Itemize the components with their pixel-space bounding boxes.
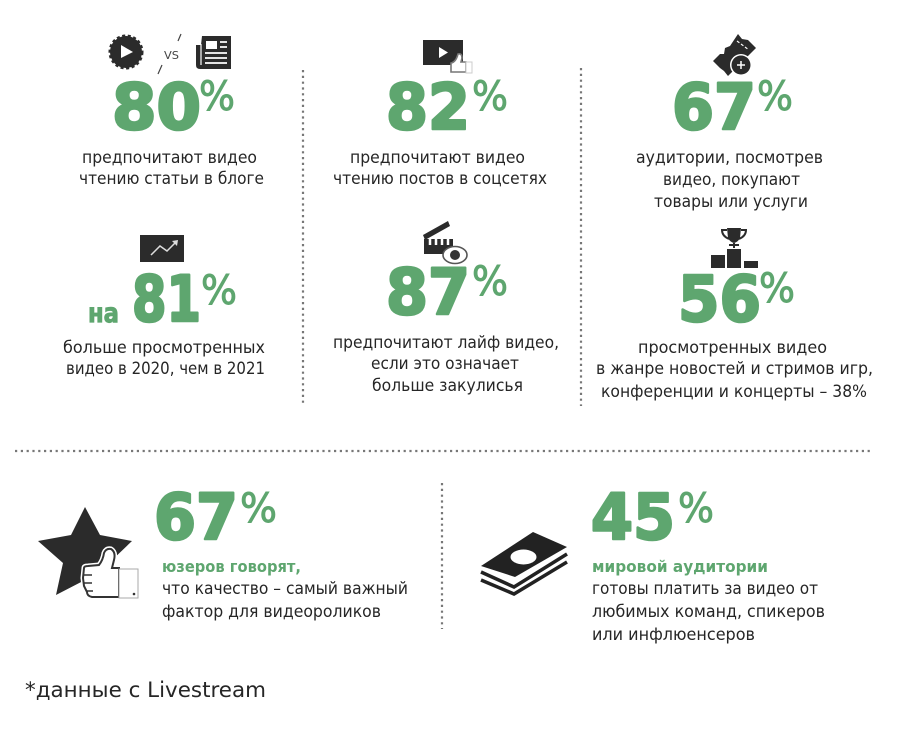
text: audience ready to pay [592, 557, 825, 644]
text: audience ready to pay: любимых команд, спикеров [592, 602, 825, 621]
panel: 82% video vs social posts [333, 40, 547, 188]
number: 82%: % [472, 74, 508, 120]
number: 67%: % [240, 486, 277, 532]
number: 80%: 80 [112, 71, 201, 144]
text: quality is most important [162, 557, 408, 621]
panel: 56% news and streams [596, 228, 873, 401]
text: audience ready to pay: готовы платить за видео от [592, 579, 818, 598]
text: prefer video over blog: чтению статьи в блоге [79, 169, 264, 188]
text: prefer live video: если это означает [371, 354, 519, 373]
text: prefer video over social posts: чтению постов в соцсетях [333, 169, 547, 188]
number: 87%: 87 [386, 256, 470, 329]
text: prefer live video: предпочитают лайф видео, [333, 333, 559, 352]
text: news and game streams: в жанре новостей и стримов игр, [596, 359, 873, 378]
number: на 81%: 81 [132, 263, 201, 336]
icon: growth chart [140, 235, 184, 262]
text: news and game streams: просмотренных видео [638, 338, 827, 357]
panel: 67% quality [38, 481, 408, 621]
text: audience buys after video [636, 148, 823, 211]
panel: 80% video vs blog [79, 34, 264, 188]
panel: 81% more views [63, 235, 265, 378]
text: more videos watched: видео в 2020, чем в 2021 [66, 359, 265, 378]
text: audience ready to pay: мировой аудитории [592, 557, 768, 576]
panel: 87% live video [333, 221, 559, 395]
footnote: source: *данные с Livestream [25, 678, 266, 702]
text: audience buys after video: аудитории, посмотрев [636, 148, 823, 167]
text: news and game streams [596, 338, 873, 401]
number: 67%: 67 [672, 71, 756, 144]
icon: stack of money [481, 532, 567, 594]
number: на 81% [88, 263, 237, 336]
number: 45%: 45 [591, 481, 675, 554]
number: 56%: 56 [678, 263, 761, 336]
icon: star with thumb up [38, 507, 138, 598]
number: 82%: 82 [386, 71, 470, 144]
text: audience buys after video: товары или услуги [654, 192, 808, 211]
panel: 67% buy after video [636, 34, 823, 211]
icon: clapperboard with eye [423, 221, 467, 264]
icon: play badge vs newspaper [110, 34, 231, 74]
number: на 81%: на [88, 298, 119, 329]
text: prefer live video [333, 333, 559, 395]
text: quality is most important: фактор для видеороликов [162, 602, 381, 621]
number: 56%: % [759, 266, 795, 312]
text: more videos watched [63, 338, 265, 378]
icon: video with thumb up [423, 40, 472, 73]
text: news and game streams: конференции и концерты – 38% [601, 382, 867, 401]
text: quality is most important: что качество – самый важный [162, 579, 408, 598]
icon: trophy on podium [711, 228, 758, 268]
text: prefer video over blog [79, 148, 264, 188]
text: quality is most important: юзеров говорят, [162, 557, 301, 576]
number: 45%: % [678, 486, 714, 532]
text: prefer video over social posts: предпочитают видео [350, 148, 525, 167]
number: 80%: % [199, 74, 235, 120]
text: prefer video over social posts [333, 148, 547, 188]
text: audience ready to pay: или инфлюенсеров [592, 625, 755, 644]
number: 67%: % [757, 74, 793, 120]
text: prefer video over blog: предпочитают видео [82, 148, 257, 167]
text: more videos watched: больше просмотренных [63, 338, 265, 357]
icon: ticket with plus [713, 34, 756, 76]
number: 67%: 67 [154, 481, 238, 554]
panel: 45% pay for video [481, 481, 825, 644]
icon: play badge vs newspaper: VS [164, 49, 179, 62]
number: 87%: % [472, 259, 508, 305]
text: audience buys after video: видео, покупают [663, 170, 800, 189]
text: prefer live video: больше закулисья [372, 376, 523, 395]
number: на 81%: % [201, 268, 237, 314]
